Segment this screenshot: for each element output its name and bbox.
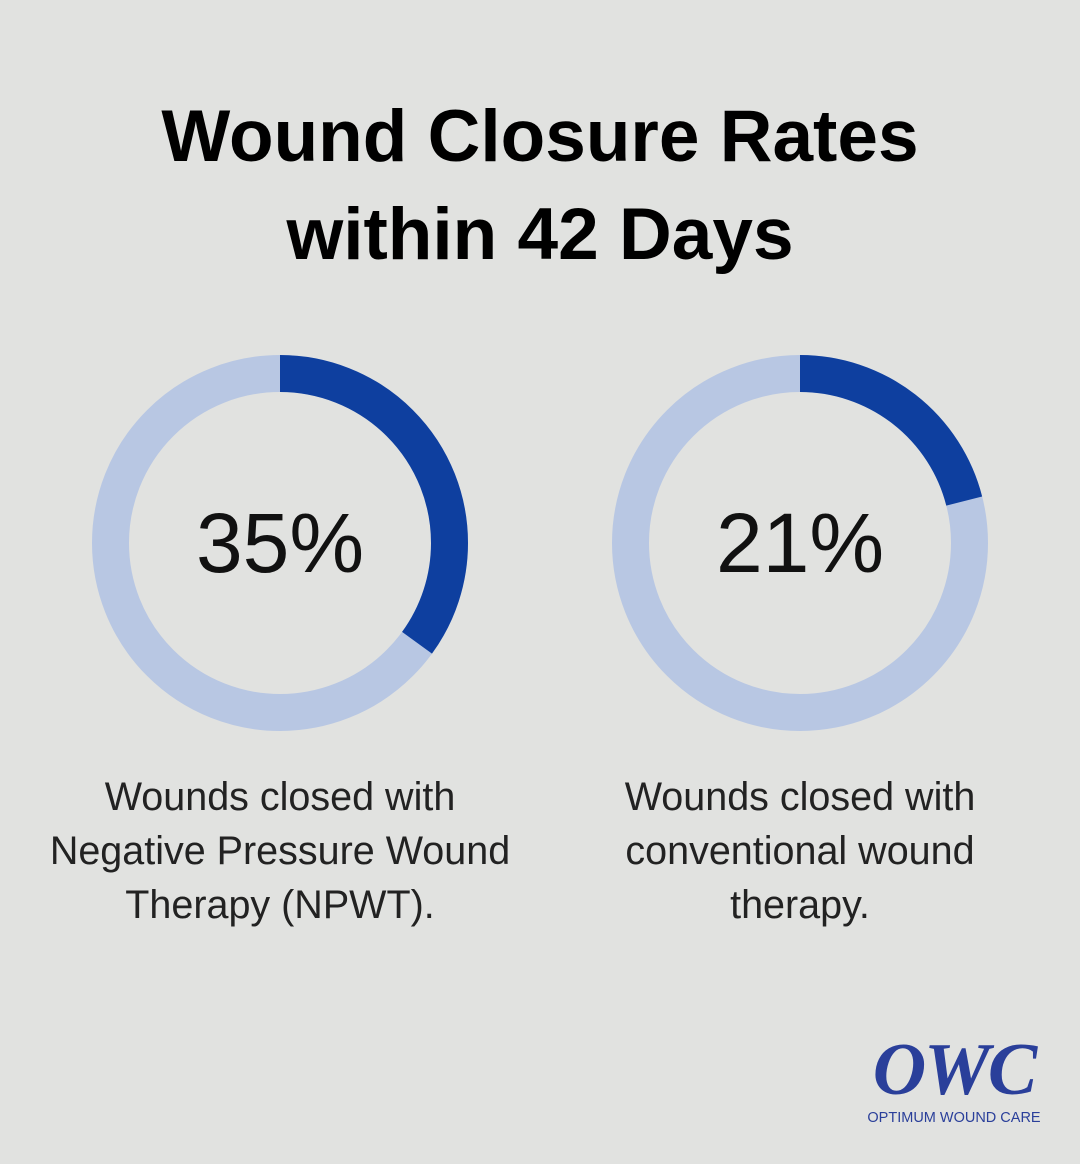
title	[161, 96, 919, 275]
caption: conventional: therapy.	[730, 883, 870, 927]
caption: conventional: Wounds closed with	[625, 775, 975, 819]
caption: conventional	[625, 775, 975, 927]
caption: NPWT: Wounds closed with	[105, 775, 455, 819]
donut chart: NPWT 35%	[92, 355, 468, 731]
logo: OPTIMUM WOUND CARE	[867, 1110, 1041, 1126]
donut chart: conventional 21%: 21%	[716, 496, 884, 590]
donut chart: conventional 21%	[612, 355, 988, 731]
caption: conventional: conventional wound	[625, 829, 975, 873]
logo: OWC	[873, 1029, 1035, 1111]
caption: NPWT: Negative Pressure Wound	[50, 829, 510, 873]
caption: NPWT: Therapy (NPWT).	[125, 883, 435, 927]
title: within 42 Days	[286, 194, 794, 275]
caption: NPWT	[50, 775, 510, 927]
donut chart: NPWT 35%: 35%	[196, 496, 364, 590]
title: Wound Closure Rates	[161, 96, 919, 177]
